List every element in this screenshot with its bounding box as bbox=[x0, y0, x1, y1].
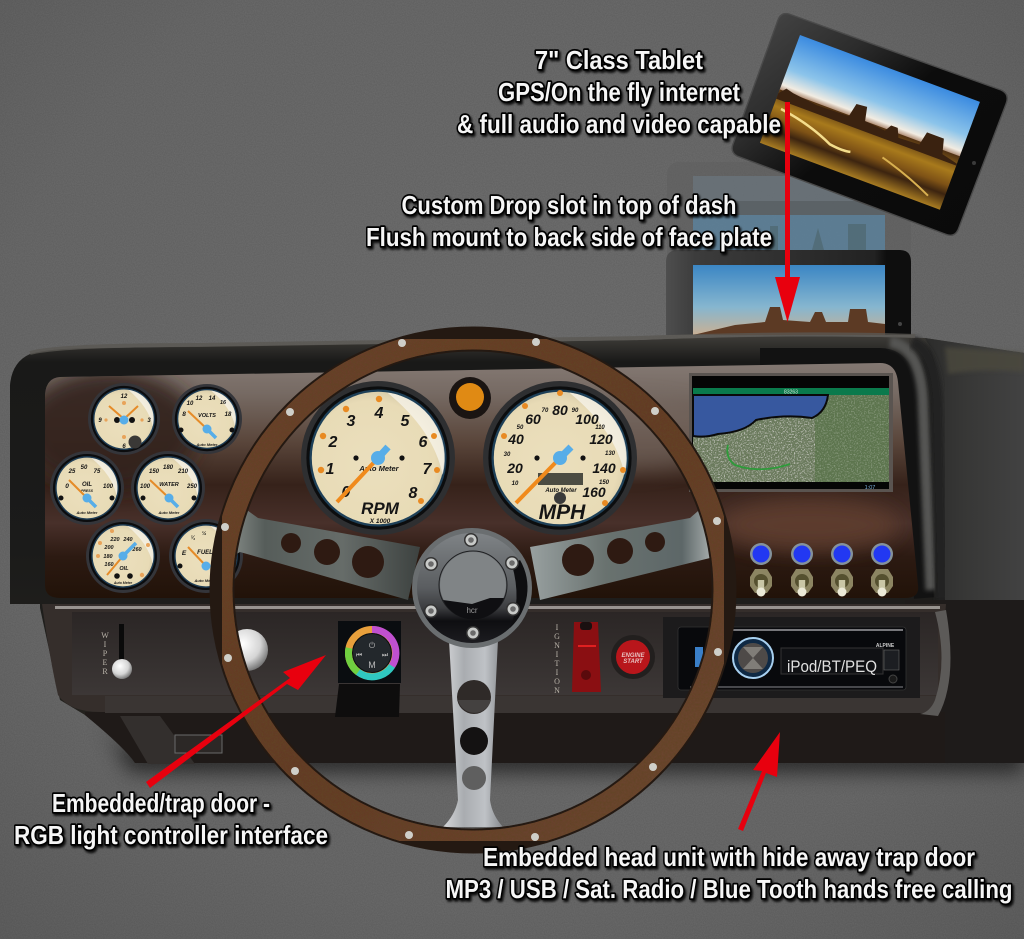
wiper control: P bbox=[103, 649, 108, 658]
tachometer: 2 bbox=[328, 434, 338, 451]
engine start button: ENGINE bbox=[621, 653, 645, 659]
embedded navigation tablet bbox=[689, 373, 893, 492]
ignition label: I bbox=[556, 623, 559, 632]
tachometer: 0 bbox=[342, 484, 351, 501]
speedometer: 160 bbox=[582, 484, 606, 500]
fuel gauge: Auto Meter bbox=[194, 578, 216, 583]
dash top highlight bbox=[30, 334, 915, 353]
tachometer: 4 bbox=[374, 405, 384, 422]
caption: tablet: 7" Class Tablet bbox=[535, 45, 703, 75]
caption: drop slot: Flush mount to back side of face plate bbox=[366, 222, 772, 252]
water temperature gauge: WATER bbox=[159, 482, 179, 488]
oil temperature gauge: 160 bbox=[104, 562, 114, 568]
oil pressure gauge: 100 bbox=[103, 484, 114, 490]
tachometer: 7 bbox=[423, 461, 433, 478]
wiper control: E bbox=[103, 658, 108, 667]
speedometer: 30 bbox=[504, 452, 511, 458]
oil temperature gauge: 180 bbox=[103, 554, 113, 560]
speedometer: 110 bbox=[595, 425, 605, 431]
tachometer: RPM bbox=[361, 499, 400, 518]
speedometer: 10 bbox=[512, 481, 519, 487]
water temperature gauge: Auto Meter bbox=[158, 510, 180, 515]
speedometer: 40 bbox=[507, 431, 524, 447]
tachometer: 3 bbox=[347, 413, 356, 430]
volts gauge: 14 bbox=[209, 396, 216, 402]
oil pressure gauge: 25 bbox=[68, 469, 76, 475]
steering wheel spokes bbox=[226, 505, 720, 827]
volts gauge: Auto Meter bbox=[196, 442, 218, 447]
wiper control: W bbox=[101, 631, 109, 640]
RGB light controller: ⏮ bbox=[356, 651, 362, 659]
dash window black band bbox=[760, 358, 924, 598]
tachometer: 1 bbox=[326, 461, 335, 478]
water temperature gauge: 180 bbox=[163, 465, 174, 471]
fuel gauge: ½ bbox=[202, 530, 207, 537]
radio head unit bbox=[663, 617, 920, 698]
speedometer: 20 bbox=[506, 460, 523, 476]
ignition label: G bbox=[554, 632, 560, 641]
ignition label: N bbox=[554, 686, 560, 695]
ignition label: I bbox=[556, 650, 559, 659]
caption: RGB controller bbox=[14, 788, 328, 850]
speedometer: MPH bbox=[539, 501, 586, 524]
dash right top olive edge bbox=[945, 347, 1024, 374]
tablet dropped in slot bbox=[666, 250, 911, 335]
map bbox=[693, 395, 889, 482]
radio head unit: ALPINE bbox=[876, 643, 895, 649]
ignition label: I bbox=[556, 668, 559, 677]
ghost tablet positions bbox=[667, 162, 911, 332]
caption: drop slot: Custom Drop slot in top of dash bbox=[402, 190, 736, 220]
toggle switches bbox=[750, 569, 893, 596]
steering wheel rim bbox=[221, 338, 724, 841]
wood panel bbox=[20, 360, 925, 600]
ignition label: O bbox=[554, 677, 560, 686]
RGB light controller: ⏭ bbox=[382, 651, 389, 659]
volts gauge: VOLTS bbox=[198, 413, 216, 419]
tachometer: 5 bbox=[401, 413, 411, 430]
speedometer: 80 bbox=[552, 402, 568, 418]
ignition label: N bbox=[554, 641, 560, 650]
trap door bbox=[335, 684, 400, 717]
caption: tablet: & full audio and video capable bbox=[457, 109, 781, 139]
oil pressure gauge bbox=[50, 451, 124, 525]
water temperature gauge: 150 bbox=[149, 469, 160, 475]
wiper control: R bbox=[102, 667, 108, 676]
RGB light controller bbox=[338, 621, 401, 683]
speedometer: 120 bbox=[589, 431, 613, 447]
water temperature gauge: 210 bbox=[177, 469, 189, 475]
speedometer: 70 bbox=[542, 408, 549, 414]
volts gauge: 10 bbox=[187, 401, 194, 407]
volts gauge bbox=[172, 384, 242, 454]
embedded navigation tablet: 83263 bbox=[784, 390, 798, 396]
oil pressure gauge: 50 bbox=[81, 465, 88, 471]
tachometer: 8 bbox=[409, 485, 418, 502]
oil temperature gauge: 240 bbox=[122, 537, 133, 543]
steering wheel hub: hcr bbox=[466, 606, 478, 615]
lower pad bbox=[85, 712, 945, 763]
embedded navigation tablet: 1:07 bbox=[865, 485, 875, 491]
speedometer: 90 bbox=[572, 408, 579, 414]
tablet screen photo bbox=[760, 35, 980, 210]
oil pressure gauge: 75 bbox=[94, 469, 101, 475]
spoke holes bbox=[281, 532, 665, 578]
oil temperature gauge: 260 bbox=[131, 547, 142, 553]
wiper control: I bbox=[104, 640, 107, 649]
tachometer: X 1000 bbox=[369, 518, 391, 525]
dash window grey highlight bbox=[890, 342, 931, 590]
speedometer: 140 bbox=[592, 460, 616, 476]
RGB light controller: M bbox=[368, 660, 376, 670]
oil temperature gauge: 200 bbox=[103, 545, 114, 551]
clock gauge: 3 bbox=[147, 418, 151, 424]
engine start button: START bbox=[623, 659, 644, 665]
dash right dark strip bbox=[912, 342, 942, 600]
caption: drop slot bbox=[366, 190, 772, 252]
steering wheel hub bbox=[412, 528, 532, 648]
fuel gauge: E bbox=[182, 550, 187, 557]
clock gauge: 12 bbox=[121, 394, 128, 400]
rim rivets bbox=[221, 338, 722, 841]
ignition label: T bbox=[555, 659, 560, 668]
fuel gauge: FUEL bbox=[197, 550, 213, 556]
caption: tablet: GPS/On the fly internet bbox=[498, 77, 740, 107]
arrow: to slot bbox=[775, 102, 800, 322]
speedometer: 100 bbox=[575, 411, 599, 427]
oil temperature gauge bbox=[86, 519, 160, 593]
RGB light controller: ⏻ bbox=[369, 641, 376, 650]
caption: RGB controller: Embedded/trap door - bbox=[52, 788, 270, 818]
orange indicator light bbox=[449, 377, 491, 419]
indicator buttons bbox=[750, 543, 893, 565]
dash right upper body bbox=[925, 338, 1024, 600]
fascia panel bbox=[42, 604, 950, 764]
tachometer: 6 bbox=[419, 434, 428, 451]
speedometer: 50 bbox=[517, 425, 524, 431]
volts gauge: 8 bbox=[182, 411, 186, 418]
tachometer: Auto Meter bbox=[358, 464, 400, 473]
water temperature gauge: 250 bbox=[186, 484, 198, 490]
dash right lower body bbox=[905, 600, 1024, 763]
speedometer: Auto Meter bbox=[544, 488, 577, 494]
tachometer bbox=[301, 381, 455, 535]
engine start button bbox=[611, 635, 655, 679]
dash body bbox=[10, 336, 1024, 763]
water temperature gauge bbox=[131, 451, 205, 525]
caption: tablet bbox=[457, 45, 781, 139]
speedometer: 130 bbox=[605, 451, 616, 457]
oil pressure gauge: PRESS bbox=[81, 489, 94, 493]
oil pressure gauge: 0 bbox=[65, 483, 69, 490]
fuel gauge bbox=[169, 519, 243, 593]
speedometer bbox=[483, 381, 637, 535]
speedometer: 150 bbox=[599, 480, 610, 486]
arrow: to head unit bbox=[738, 732, 780, 831]
water temperature gauge: 100 bbox=[140, 484, 151, 490]
wiper control bbox=[101, 624, 132, 679]
volts gauge: 18 bbox=[225, 412, 232, 418]
caption: head unit bbox=[446, 842, 1012, 904]
oil temperature gauge: Auto Meter bbox=[113, 581, 133, 585]
caption: RGB controller: RGB light controller interface bbox=[14, 820, 328, 850]
oil pressure gauge: Auto Meter bbox=[76, 510, 98, 515]
volts gauge: 12 bbox=[196, 396, 203, 402]
speedometer: 60 bbox=[525, 411, 541, 427]
oil temperature gauge: 220 bbox=[109, 537, 120, 543]
arrow: to RGB controller bbox=[146, 655, 326, 788]
oil pressure gauge: OIL bbox=[82, 482, 92, 488]
volts gauge: 16 bbox=[220, 400, 227, 406]
clock gauge: 9 bbox=[98, 418, 102, 424]
ignition cover switch bbox=[572, 622, 601, 692]
clock gauge bbox=[88, 383, 160, 455]
clock gauge: 6 bbox=[122, 444, 126, 450]
fuel gauge: ¼ bbox=[191, 535, 196, 541]
drop shadow under dash bbox=[100, 720, 1024, 772]
tablet floating bbox=[732, 14, 1007, 235]
oil temperature gauge: OIL bbox=[119, 566, 129, 572]
white shift knob bbox=[226, 629, 268, 671]
radio head unit: iPod/BT/PEQ bbox=[787, 657, 877, 676]
